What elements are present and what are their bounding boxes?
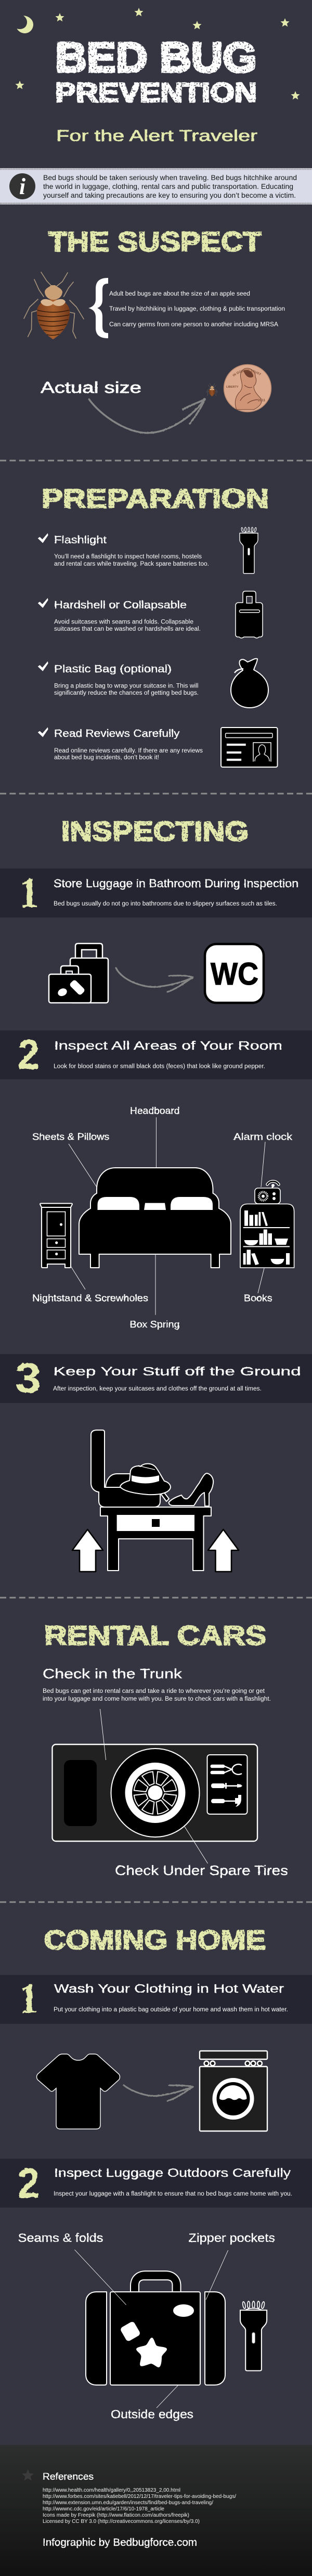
step bar 1 bbox=[0, 1974, 312, 2024]
references list: http://www.health.com/health/gallery/0,,20513823_2,00.html bbox=[43, 2488, 180, 2493]
intro text bbox=[43, 174, 297, 199]
callout: headboard bbox=[130, 1105, 180, 1168]
callout: outside edges: Outside edges bbox=[111, 2407, 193, 2421]
suspect facts: Adult bed bugs are about the size of an apple seed bbox=[109, 291, 250, 297]
icon: spare tire bbox=[111, 1749, 200, 1837]
callout: nightstand and screwholes: Nightstand & Screwholes bbox=[32, 1293, 148, 1304]
step bar 1: Bed bugs usually do not go into bathrooms due to slippery surfaces such as tiles. bbox=[54, 901, 277, 907]
intro text: the world in luggage, clothing, rental cars and public transportation. Educating bbox=[43, 183, 293, 190]
callout lines bbox=[75, 2250, 228, 2305]
icon: t-shirt bbox=[36, 2054, 120, 2129]
references list: http://wwwnc.cdc.gov/eid/article/17/6/10-1978_article bbox=[43, 2506, 164, 2512]
icon: plastic bag bbox=[231, 659, 268, 708]
item: hardshell: suitcases that can be washed or hardshells are ideal. bbox=[54, 626, 201, 632]
callout: headboard: Headboard bbox=[130, 1105, 180, 1116]
heading: rental cars: RENTAL CARS bbox=[44, 1621, 266, 1651]
step bar 1: Put your clothing into a plastic bag outside of your home and wash them in hot water. bbox=[54, 2007, 288, 2013]
item: flashlight: Flashlight bbox=[54, 534, 107, 546]
icon: info circle: i bbox=[19, 174, 26, 199]
icon: nightstand bbox=[40, 1203, 72, 1268]
title: BED BUG bbox=[55, 34, 257, 81]
references heading: References bbox=[43, 2471, 94, 2482]
step bar 2: Inspect All Areas of Your Room bbox=[54, 1039, 282, 1052]
room diagram bbox=[32, 1105, 294, 1330]
header bbox=[15, 8, 300, 145]
icon: flashlight bbox=[240, 2301, 267, 2371]
item: flashlight: and rental cars while traveling. Pack spare batteries too. bbox=[54, 561, 209, 567]
check in the trunk text bbox=[43, 1666, 271, 1702]
item: reviews: about bed bug incidents, don’t book it! bbox=[54, 755, 159, 761]
trunk illustration bbox=[52, 1744, 257, 1841]
icon: high heel shoe bbox=[168, 1473, 213, 1506]
icon: bookshelf bbox=[240, 1204, 294, 1268]
credit: Infographic by Bedbugforce.com bbox=[43, 2537, 197, 2548]
item: plastic bag bbox=[38, 661, 199, 696]
heading: inspecting: INSPECTING bbox=[61, 816, 249, 847]
item: reviews: Read Reviews Carefully bbox=[54, 728, 180, 739]
step bar 2: 2 bbox=[18, 1031, 40, 1078]
panel: rental cars bbox=[43, 1621, 288, 1878]
step bar 3: After inspection, keep your suitcases and clothes off the ground at all times. bbox=[53, 1386, 262, 1392]
references list bbox=[43, 2488, 236, 2524]
title bbox=[55, 34, 257, 108]
step bar 1: Wash Your Clothing in Hot Water bbox=[54, 1982, 284, 1995]
actual size label: Actual size bbox=[41, 378, 141, 397]
callout: spare tires bbox=[115, 1827, 288, 1878]
step bar 3 bbox=[0, 1354, 312, 1403]
step bar 1: 1 bbox=[19, 1974, 38, 2023]
item: hardshell bbox=[38, 598, 201, 632]
icon: large suitcase bbox=[86, 2271, 225, 2385]
panel: the suspect bbox=[23, 227, 285, 434]
item: hardshell: Hardshell or Collapsable bbox=[54, 600, 187, 611]
item: hardshell: Avoid suitcases with seams and folds. Collapsable bbox=[54, 619, 193, 626]
callout: box spring: Box Spring bbox=[130, 1319, 180, 1330]
icon: id card bbox=[221, 728, 278, 767]
suspect facts: Travel by hitchhiking in luggage, clothing & public transportation bbox=[109, 306, 285, 312]
suspect facts bbox=[109, 291, 285, 328]
check in the trunk text: Bed bugs can get into rental cars and take a ride to wherever you’re going or get bbox=[43, 1688, 265, 1694]
subtitle: For the Alert Traveler bbox=[56, 126, 257, 145]
callout: spare tires: Check Under Spare Tires bbox=[115, 1863, 288, 1878]
item: flashlight: You’ll need a flashlight to inspect hotel rooms, hostels bbox=[54, 554, 202, 560]
step bar 2: Look for blood stains or small black dots (feces) that look like ground pepper. bbox=[54, 1064, 265, 1070]
icon: penny: 2011 bbox=[258, 399, 265, 402]
panel: footer references bbox=[0, 2445, 312, 2576]
step bar 3: 3 bbox=[15, 1355, 41, 1402]
step bar 1: 1 bbox=[19, 869, 38, 917]
references list: Icons made by Freepik (http://www.flaticon.com/authors/freepik) bbox=[43, 2513, 189, 2518]
icon: luggage bbox=[49, 943, 108, 1003]
icon: bed bug illustration bbox=[24, 272, 84, 339]
icon: radio alarm clock bbox=[255, 1181, 280, 1204]
callout: trunk bbox=[100, 1709, 106, 1760]
references list: http://www.extension.umn.edu/garden/insects/find/bed-bugs-and-traveling/ bbox=[43, 2500, 213, 2506]
arrow: up left bbox=[72, 1529, 103, 1572]
stars bbox=[15, 8, 300, 99]
step bar 2: 2 bbox=[18, 2160, 40, 2207]
arrow: shirt to washer bbox=[124, 2085, 193, 2101]
panel: coming home bbox=[0, 1925, 312, 2421]
icon: open suitcase bbox=[91, 1430, 169, 1507]
item: plastic bag: Plastic Bag (optional) bbox=[54, 664, 172, 675]
icon: tiny bed bug bbox=[206, 384, 218, 397]
item: plastic bag: significantly reduce the chances of getting bed bugs. bbox=[54, 690, 199, 696]
title: PREVENTION bbox=[55, 78, 257, 108]
table scene bbox=[72, 1430, 239, 1572]
icon: washing machine bbox=[200, 2051, 267, 2131]
heading: the suspect: THE SUSPECT bbox=[48, 227, 262, 257]
step bar 3: Keep Your Stuff off the Ground bbox=[54, 1364, 301, 1378]
item: flashlight bbox=[38, 533, 209, 567]
heading: preparation: PREPARATION bbox=[42, 484, 269, 513]
icon: bed bbox=[79, 1168, 231, 1268]
callout: sheets and pillows: Sheets & Pillows bbox=[32, 1132, 109, 1142]
icon: wc sign: WC bbox=[211, 957, 258, 991]
callout: books bbox=[244, 1268, 272, 1304]
callout: alarm clock bbox=[233, 1132, 293, 1187]
icon: suitcase bbox=[236, 591, 263, 638]
arrow: luggage to bathroom bbox=[116, 968, 193, 992]
icon: wc sign bbox=[205, 944, 264, 1003]
callout: books: Books bbox=[244, 1293, 272, 1304]
icon: penny: LIBERTY bbox=[226, 386, 239, 389]
item: reviews: Read online reviews carefully. If there are any reviews bbox=[54, 748, 203, 754]
callout: seams and folds: Seams & folds bbox=[18, 2231, 103, 2245]
intro text: Bed bugs should be taken seriously when traveling. Bed bugs hitchhike around bbox=[43, 174, 297, 182]
icon: toolbox bbox=[207, 1755, 248, 1814]
callout: sheets and pillows bbox=[32, 1132, 109, 1187]
arrow: to actual size bug bbox=[89, 399, 205, 433]
icon: crescent moon bbox=[17, 16, 33, 33]
check in the trunk text: Check in the Trunk bbox=[43, 1666, 183, 1681]
icon: info circle bbox=[9, 173, 35, 199]
icon: hat bbox=[120, 1464, 171, 1495]
icon: dim star bbox=[22, 2469, 34, 2481]
suspect facts: Can carry germs from one person to another including MRSA bbox=[109, 322, 278, 328]
references list: Licensed by CC BY 3.0 (http://creativecommons.org/licenses/by/3.0) bbox=[43, 2519, 200, 2524]
icon: penny bbox=[224, 364, 271, 412]
panel: preparation bbox=[38, 484, 277, 767]
brace bbox=[88, 278, 108, 338]
intro text: yourself and taking precautions are key to ensuring you don’t become a victim. bbox=[43, 192, 296, 199]
icon: penny: IN GOD WE TRUST bbox=[232, 369, 261, 377]
step bar 2 bbox=[0, 1030, 312, 1079]
item: reviews bbox=[38, 727, 203, 761]
check in the trunk text: into your luggage and come home with you. Be sure to check cars with a flashlight. bbox=[43, 1696, 271, 1702]
callout: nightstand and screwholes bbox=[32, 1266, 148, 1304]
step bar 2: Inspect your luggage with a flashlight to ensure that no bed bugs came home with you. bbox=[54, 2191, 292, 2197]
item: plastic bag: Bring a plastic bag to wrap your suitcase in. This will bbox=[54, 683, 199, 689]
heading: coming home: COMING HOME bbox=[44, 1925, 266, 1956]
callout: zipper pockets: Zipper pockets bbox=[188, 2231, 275, 2245]
step bar 1: Store Luggage in Bathroom During Inspection bbox=[54, 877, 298, 890]
arrow: up right bbox=[208, 1529, 239, 1572]
references list: http://www.forbes.com/sites/katiebell/2012/12/17/traveler-tips-for-avoiding-bed-bugs/ bbox=[43, 2494, 236, 2500]
icon: table bbox=[100, 1507, 211, 1571]
step bar 2 bbox=[0, 2159, 312, 2208]
panel: inspecting bbox=[0, 816, 312, 1572]
step bar 2: Inspect Luggage Outdoors Carefully bbox=[54, 2166, 291, 2179]
callout: outside edges bbox=[111, 2385, 193, 2421]
step bar 1 bbox=[0, 869, 312, 917]
callout: alarm clock: Alarm clock bbox=[233, 1132, 293, 1142]
panel: intro strip bbox=[0, 168, 312, 205]
icon: flashlight bbox=[240, 527, 258, 573]
